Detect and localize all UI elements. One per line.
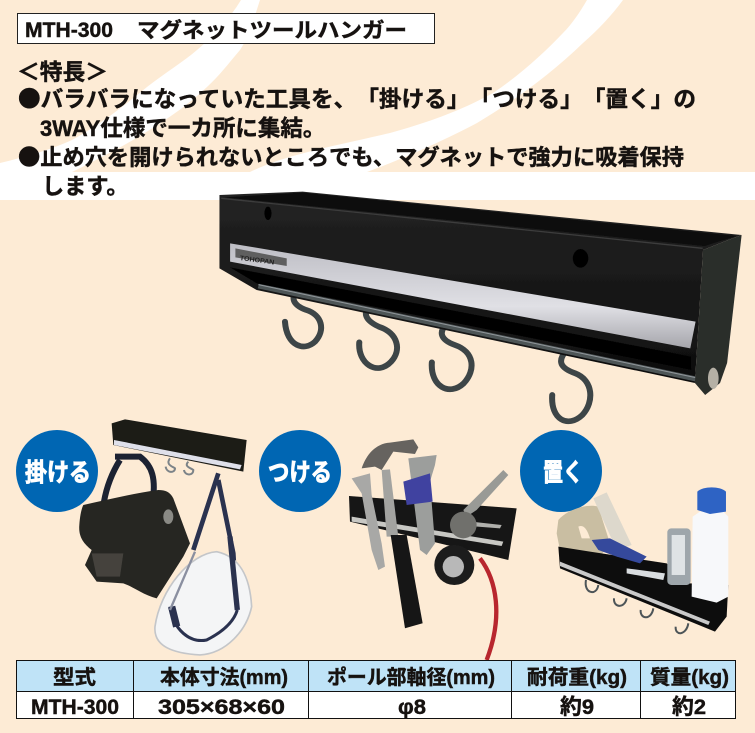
title box bbox=[18, 14, 434, 44]
mounting holes bbox=[264, 207, 272, 220]
bag bbox=[79, 490, 190, 598]
markers bbox=[627, 568, 665, 580]
header labels: 質量(kg) bbox=[650, 666, 729, 689]
air hose bbox=[480, 558, 496, 660]
feature 1 line 1: ●バラバラになっていた工具を、「掛ける」「つける」「置く」の bbox=[18, 82, 696, 114]
feature 2 line 2: します。 bbox=[42, 174, 129, 199]
shelf body bbox=[219, 192, 742, 383]
brand label bbox=[235, 248, 287, 266]
air tool bbox=[463, 470, 508, 517]
hammer bbox=[362, 439, 418, 470]
scene: tools attached by magnet bbox=[349, 439, 517, 660]
features heading: ＜特長＞ bbox=[17, 60, 108, 85]
header labels: ポール部軸径(mm) bbox=[327, 666, 495, 689]
badge: place bbox=[520, 430, 602, 512]
title box: MTH-300 bbox=[25, 19, 113, 42]
header labels bbox=[53, 666, 729, 689]
features text block bbox=[17, 60, 696, 199]
data row: MTH-300 bbox=[31, 695, 119, 719]
feature 1 line 2: 3WAY仕様で一カ所に集結。 bbox=[40, 116, 325, 141]
header labels: 本体寸法(mm) bbox=[160, 666, 288, 689]
badge: attach bbox=[259, 430, 341, 512]
main product photo: tool hanger bbox=[219, 192, 742, 421]
feature 2 line 1: ●止め穴を開けられないところでも、マグネットで強力に吸着保持 bbox=[18, 140, 684, 172]
hex key holder bbox=[403, 473, 433, 505]
small jar bbox=[667, 528, 691, 585]
rod bbox=[258, 286, 697, 379]
mini shelf bbox=[112, 419, 247, 472]
hex keys bbox=[408, 455, 437, 555]
bottle cap bbox=[697, 487, 726, 514]
mini shelf bbox=[349, 496, 517, 560]
silver strip bbox=[230, 243, 696, 348]
badge: hang: 掛ける bbox=[25, 459, 91, 487]
data row: 305×68×60 bbox=[158, 695, 285, 719]
packet bbox=[593, 492, 632, 550]
data row: φ8 bbox=[398, 695, 426, 719]
scene: items placed on shelf bbox=[557, 487, 728, 633]
badge: hang bbox=[16, 430, 98, 512]
badge: attach: つける bbox=[268, 459, 332, 487]
gauge bbox=[434, 545, 474, 585]
data row: 約9 bbox=[560, 695, 594, 719]
white bottle bbox=[692, 512, 728, 603]
tape roll bbox=[557, 506, 610, 557]
lower lip bbox=[230, 267, 691, 370]
shelf top opening bbox=[225, 193, 736, 246]
mini hooks bbox=[166, 458, 193, 474]
end cap roller bbox=[708, 368, 719, 389]
spec table bbox=[16, 660, 736, 719]
mini hooks bbox=[586, 580, 688, 633]
blue pliers bbox=[592, 538, 647, 563]
header labels: 耐荷重(kg) bbox=[527, 666, 627, 689]
end panel bbox=[695, 235, 742, 395]
badge: place: 置く bbox=[543, 459, 583, 487]
main product photo: tool hanger: TOHOPAN bbox=[239, 255, 275, 266]
helmet bbox=[155, 552, 252, 655]
wrench bbox=[352, 473, 385, 570]
bag handle bbox=[104, 457, 154, 502]
data row bbox=[31, 695, 706, 719]
scene: hanging bag and helmet bbox=[79, 419, 252, 655]
data row: 約2 bbox=[672, 695, 706, 719]
header labels: 型式 bbox=[53, 666, 96, 689]
helmet straps bbox=[193, 473, 237, 610]
title box: マグネットツールハンガー bbox=[137, 18, 407, 42]
hooks bbox=[285, 287, 590, 421]
mini shelf bbox=[558, 547, 728, 632]
table header row bbox=[16, 660, 736, 692]
